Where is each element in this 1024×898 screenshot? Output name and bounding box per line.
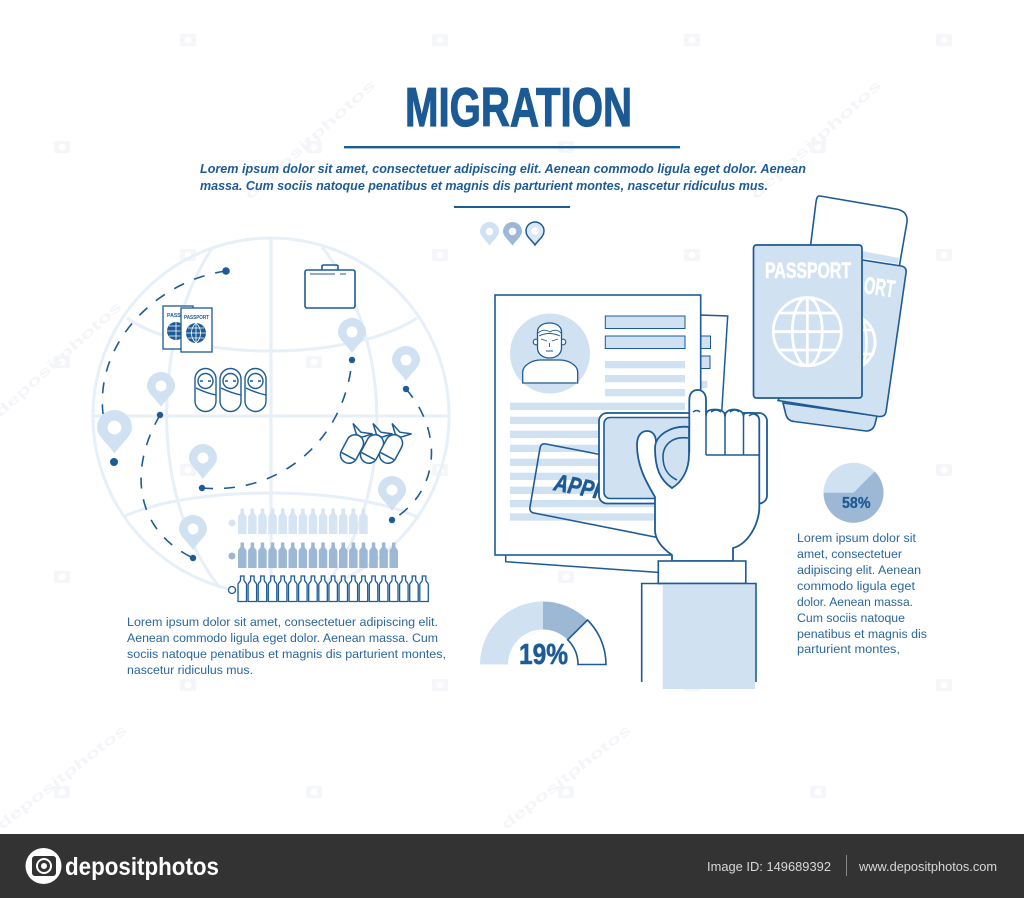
map pins: [97, 318, 420, 550]
pie chart: 58%: 58%: [842, 495, 870, 512]
globe: [93, 238, 449, 594]
icon: bombs: [335, 424, 412, 467]
form fields: [605, 316, 685, 396]
icon: babies: [195, 368, 266, 412]
footer separator: [846, 855, 847, 876]
sleeve: [642, 584, 756, 689]
legend pins: [480, 222, 544, 246]
cuff: [658, 561, 746, 584]
intro text: [200, 161, 806, 193]
right paragraph: parturient montes,: [797, 642, 900, 656]
route 2: [141, 412, 196, 561]
left paragraph: Lorem ipsum dolor sit amet, consectetuer adipiscing elit.: [127, 615, 438, 629]
second passport: [778, 258, 906, 417]
icon: briefcase: [305, 265, 355, 308]
footer bar: [0, 834, 1024, 898]
icon: small passports: PASSPORT: [184, 315, 210, 321]
watermark pattern: depositphotos: [241, 76, 379, 202]
left paragraph: [127, 615, 446, 677]
document: [495, 295, 701, 555]
right paragraph: Cum sociis natoque: [797, 611, 905, 625]
portrait: [510, 314, 590, 394]
left paragraph: Aenean commodo ligula eget dolor. Aenean massa. Cum: [127, 631, 438, 645]
icon: small passports: [163, 306, 212, 352]
ticket: [810, 196, 907, 268]
route 3: [199, 357, 355, 491]
back sheet: [506, 315, 728, 572]
website: www.depositphotos.com: [858, 859, 997, 874]
right paragraph: dolor. Aenean massa.: [797, 595, 913, 609]
approved card: APPR: [551, 469, 611, 506]
front passport: PASSPORT: [765, 258, 851, 283]
front passport: [754, 245, 862, 398]
hand: [637, 390, 759, 561]
fingerprint: [655, 427, 689, 488]
right paragraph: penatibus et magnis dis: [797, 627, 927, 641]
title rule: [344, 146, 680, 148]
right paragraph: Lorem ipsum dolor sit: [797, 531, 917, 545]
approved card: [530, 444, 680, 538]
second passport: ORT: [862, 272, 897, 303]
logo wordmark: depositphotos: [65, 853, 219, 881]
intro text: massa. Cum sociis natoque penatibus et magnis dis parturient montes, nascetur ridiculus mus.: [200, 178, 768, 193]
right paragraph: adipiscing elit. Aenean: [797, 563, 921, 577]
pictogram row 1: [228, 508, 368, 534]
right paragraph: [797, 531, 927, 656]
gauge chart: 19%: 19%: [519, 639, 568, 671]
icon: camera logo: [26, 848, 62, 884]
right paragraph: amet, consectetuer: [797, 547, 902, 561]
text bars: [510, 403, 685, 521]
gauge chart: 19%: [480, 602, 606, 671]
intro text: Lorem ipsum dolor sit amet, consectetuer adipiscing elit. Aenean commodo ligula eget dolor. Aenean: [200, 161, 806, 176]
icon: small passports: PASS: [167, 313, 181, 319]
route 4: [389, 386, 431, 523]
watermark pattern: depositphotos: [747, 76, 885, 202]
rear passport booklet: [783, 403, 877, 431]
title: MIGRATION: [405, 76, 632, 138]
right paragraph: commodo ligula eget: [797, 579, 916, 593]
route 1: [102, 267, 230, 414]
pictogram row 2: [228, 542, 398, 568]
pie chart: 58%: [824, 463, 884, 523]
image id: Image ID: 149689392: [707, 859, 831, 874]
left paragraph: sociis natoque penatibus et magnis dis parturient montes,: [127, 647, 446, 661]
short rule: [454, 206, 570, 208]
pictogram row 3: [228, 576, 428, 602]
scanner: [599, 413, 767, 504]
watermark pattern: depositphotos: [498, 721, 634, 832]
left paragraph: nascetur ridiculus mus.: [127, 663, 253, 677]
